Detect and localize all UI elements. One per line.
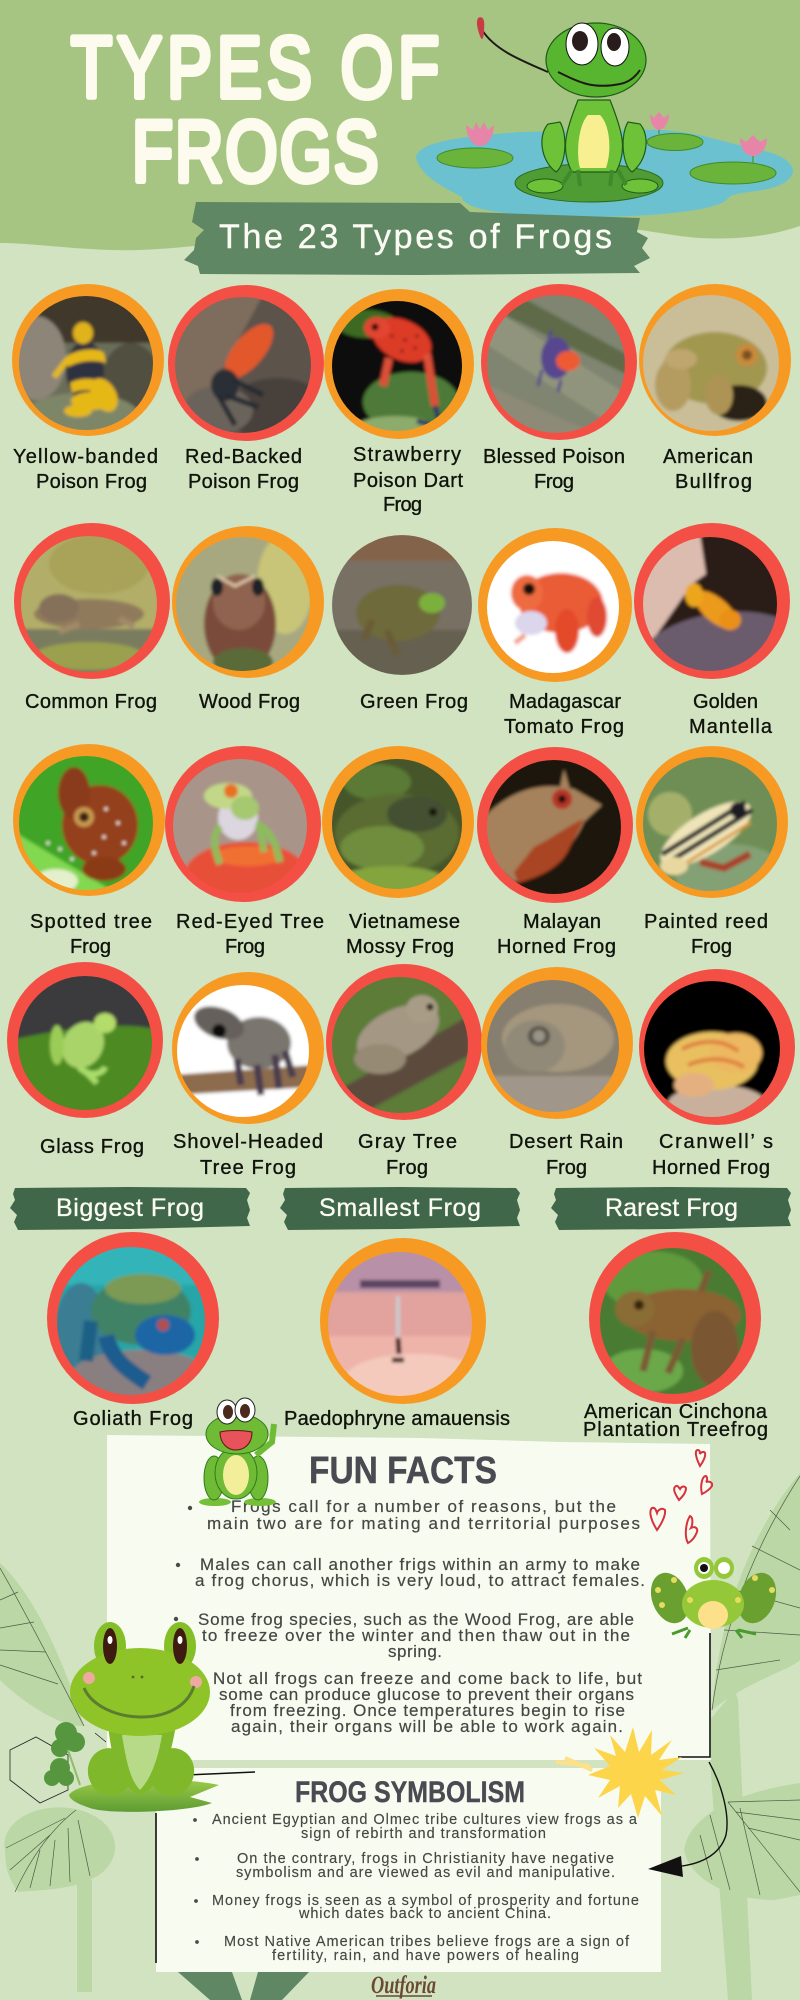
frog card: Red-Eyed Tree Frog [165, 746, 324, 958]
text block: symbolism list [193, 1812, 639, 1964]
frog card: Gray Tree Frog: Frog [386, 1157, 428, 1179]
frog card: Blessed Poison Frog: Frog [534, 471, 574, 493]
frog card: Red-Backed Poison Frog: Red-Backed [185, 446, 302, 468]
text block: symbolism list: symbolism and are viewed as evil and manipulative. [236, 1865, 615, 1881]
text block: symbolism list: Money frogs is seen as a symbol of prosperity and fortune [212, 1893, 639, 1909]
frog card: Painted reed Frog: Painted reed [644, 911, 768, 933]
frog card: Madagascar Tomato Frog [478, 528, 632, 738]
frog card: Spotted tree Frog: Frog [70, 936, 111, 958]
title: TYPES OF [71, 20, 439, 116]
frog card: Malayan Horned Frog: Horned Frog [497, 936, 616, 958]
frog card: Painted reed Frog: Frog [691, 936, 732, 958]
frog card: Blessed Poison Frog: Blessed Poison [483, 446, 625, 468]
frog card: Red-Backed Poison Frog: Poison Frog [188, 471, 299, 493]
text block: fun facts list: spring. [388, 1642, 442, 1661]
frog card: Madagascar Tomato Frog: Tomato Frog [504, 716, 624, 738]
frog card: Vietnamese Mossy Frog [322, 746, 474, 958]
leaf: upper left [0, 1563, 84, 1726]
frog card: Painted reed Frog [636, 746, 788, 958]
banner: Smallest Frog: Smallest Frog [319, 1194, 481, 1222]
frog card: American Cinchona Plantation Treefrog [583, 1232, 768, 1441]
heading: fun facts: FUN FACTS [309, 1450, 497, 1492]
panel: fun facts [107, 1435, 711, 1760]
frog card: Vietnamese Mossy Frog: Mossy Frog [346, 936, 454, 958]
banner: The 23 Types of Frogs [184, 202, 650, 275]
frog card: Desert Rain Frog: Frog [546, 1157, 587, 1179]
frog card: Golden Mantella: Golden [693, 691, 758, 713]
frog card: Goliath Frog: Goliath Frog [73, 1408, 193, 1430]
text block: fun facts list: a frog chorus, which is very loud, to attract females. [195, 1571, 645, 1590]
text block: symbolism list: Ancient Egyptian and Olmec tribe cultures view frogs as a [212, 1812, 638, 1828]
frog card: Common Frog: Common Frog [25, 691, 157, 713]
text block: fun facts list: Not all frogs can freeze and come back to life, but [213, 1669, 642, 1688]
text block: symbolism list: which dates back to ancient China. [298, 1906, 551, 1922]
frog card: American Bullfrog [639, 284, 791, 493]
frog card: Blessed Poison Frog [481, 284, 637, 493]
icon: sun [556, 1727, 684, 1818]
frog card: Wood Frog: Wood Frog [199, 691, 300, 713]
title: FROGS [132, 104, 378, 200]
banner: Rarest Frog: Rarest Frog [605, 1194, 738, 1222]
frog card: Desert Rain Frog: Desert Rain [509, 1131, 623, 1153]
frog card: Yellow-banded Poison Frog [6, 284, 164, 493]
frog card: Cranwell's Horned Frog [639, 969, 795, 1179]
frog card: Green Frog [330, 533, 474, 713]
frog card: American Bullfrog: American [663, 446, 753, 468]
text block: symbolism list: Most Native American tribes believe frogs are a sign of [224, 1934, 630, 1950]
frog card: American Cinchona Plantation Treefrog: American Cinchona [584, 1401, 768, 1423]
frog card: Cranwell's Horned Frog: Cranwell’ s [659, 1131, 773, 1153]
frog card: Paedophryne amauensis: Paedophryne amauensis [284, 1408, 510, 1430]
frog card: Spotted tree Frog: Spotted tree [30, 911, 152, 933]
frog card: Cranwell's Horned Frog: Horned Frog [652, 1157, 770, 1179]
frog card: American Cinchona Plantation Treefrog: Plantation Treefrog [583, 1419, 768, 1441]
frog card: Madagascar Tomato Frog: Madagascar [509, 691, 621, 713]
leaf: lower right [684, 1783, 800, 1900]
banner: Smallest Frog [280, 1187, 520, 1230]
frog card: Shovel-Headed Tree Frog [172, 972, 324, 1179]
frog card: Red-Eyed Tree Frog: Red-Eyed Tree [176, 911, 324, 933]
icon: winking spotted frog [644, 1557, 783, 1638]
header background [0, 0, 800, 250]
frog card: Malayan Horned Frog [477, 747, 633, 958]
frog card: Spotted tree Frog [13, 744, 165, 958]
frog card: Gray Tree Frog: Gray Tree [358, 1131, 457, 1153]
frog card: Desert Rain Frog [481, 967, 633, 1179]
frog card: Strawberry Poison Dart Frog: Poison Dart [353, 470, 463, 492]
banner: Biggest Frog: Biggest Frog [56, 1194, 204, 1222]
frog card: Malayan Horned Frog: Malayan [523, 911, 601, 933]
title [71, 20, 439, 200]
banner: The 23 Types of Frogs: The 23 Types of Frogs [219, 218, 612, 256]
frog card: Wood Frog [172, 526, 324, 713]
frog card: Common Frog [14, 523, 170, 713]
leaf: upper right with stem [708, 1473, 800, 2000]
frog card: Gray Tree Frog [326, 964, 482, 1179]
text block: symbolism list: fertility, rain, and have powers of healing [272, 1948, 579, 1964]
frog card: American Bullfrog: Bullfrog [675, 471, 752, 493]
text block: fun facts list: Frogs call for a number of reasons, but the [231, 1497, 616, 1516]
text block: fun facts list: Males can call another frigs within an army to make [200, 1555, 640, 1574]
text block: fun facts list: main two are for mating and territorial purposes [207, 1514, 640, 1533]
frog card: Strawberry Poison Dart Frog: Strawberry [353, 444, 461, 466]
frog card: Vietnamese Mossy Frog: Vietnamese [349, 911, 460, 933]
arrow: curved black [648, 1762, 727, 1877]
frog card: Green Frog: Green Frog [360, 691, 468, 713]
heading: frog symbolism: FROG SYMBOLISM [295, 1776, 525, 1809]
frog card: Glass Frog [7, 962, 163, 1158]
text block: fun facts list [174, 1497, 645, 1736]
icon: big smiling frog on lily pad [69, 1622, 219, 1812]
text block: fun facts list: from freezing. Once temperatures begin to rise [230, 1701, 625, 1720]
frog card: Golden Mantella: Mantella [689, 716, 773, 738]
text block: symbolism list: On the contrary, frogs in Christianity have negative [237, 1851, 614, 1867]
banner: Biggest Frog [10, 1187, 250, 1230]
frog card: Goliath Frog [47, 1232, 219, 1430]
text block: fun facts list: Some frog species, such as the Wood Frog, are able [198, 1610, 634, 1629]
frog card: Yellow-banded Poison Frog: Yellow-banded [13, 446, 158, 468]
frog card: Yellow-banded Poison Frog: Poison Frog [36, 471, 147, 493]
text block: symbolism list: sign of rebirth and transformation [301, 1826, 546, 1842]
logo: Outforia: Outforia [371, 1972, 436, 1999]
frog card: Strawberry Poison Dart Frog [324, 289, 474, 516]
illustration: frog on pond [416, 17, 793, 217]
leaves: bottom dark [178, 1972, 309, 2000]
leaf: lower left [5, 1807, 115, 1992]
text block: fun facts list: to freeze over the winter and then thaw out in the [202, 1626, 630, 1645]
frog card: Glass Frog: Glass Frog [40, 1136, 144, 1158]
icon: waving frog [199, 1398, 276, 1506]
banner: Rarest Frog [551, 1187, 791, 1230]
icon: clovers and hexagons [10, 1722, 106, 1803]
panel: frog symbolism [156, 1768, 661, 1972]
decorative panel corner lines [156, 1633, 710, 1963]
frog card: Golden Mantella [634, 523, 790, 738]
text block: fun facts list: some can produce glucose to prevent their organs [219, 1685, 634, 1704]
frog card: Red-Backed Poison Frog [168, 285, 328, 493]
frog card: Strawberry Poison Dart Frog: Frog [383, 494, 422, 516]
text block: fun facts list: again, their organs will be able to work again. [231, 1717, 623, 1736]
frog card: Paedophryne amauensis [284, 1238, 510, 1430]
frog card: Shovel-Headed Tree Frog: Tree Frog [200, 1157, 296, 1179]
frog card: Red-Eyed Tree Frog: Frog [225, 936, 265, 958]
icon: hearts [650, 1450, 712, 1543]
frog card: Shovel-Headed Tree Frog: Shovel-Headed [173, 1131, 323, 1153]
